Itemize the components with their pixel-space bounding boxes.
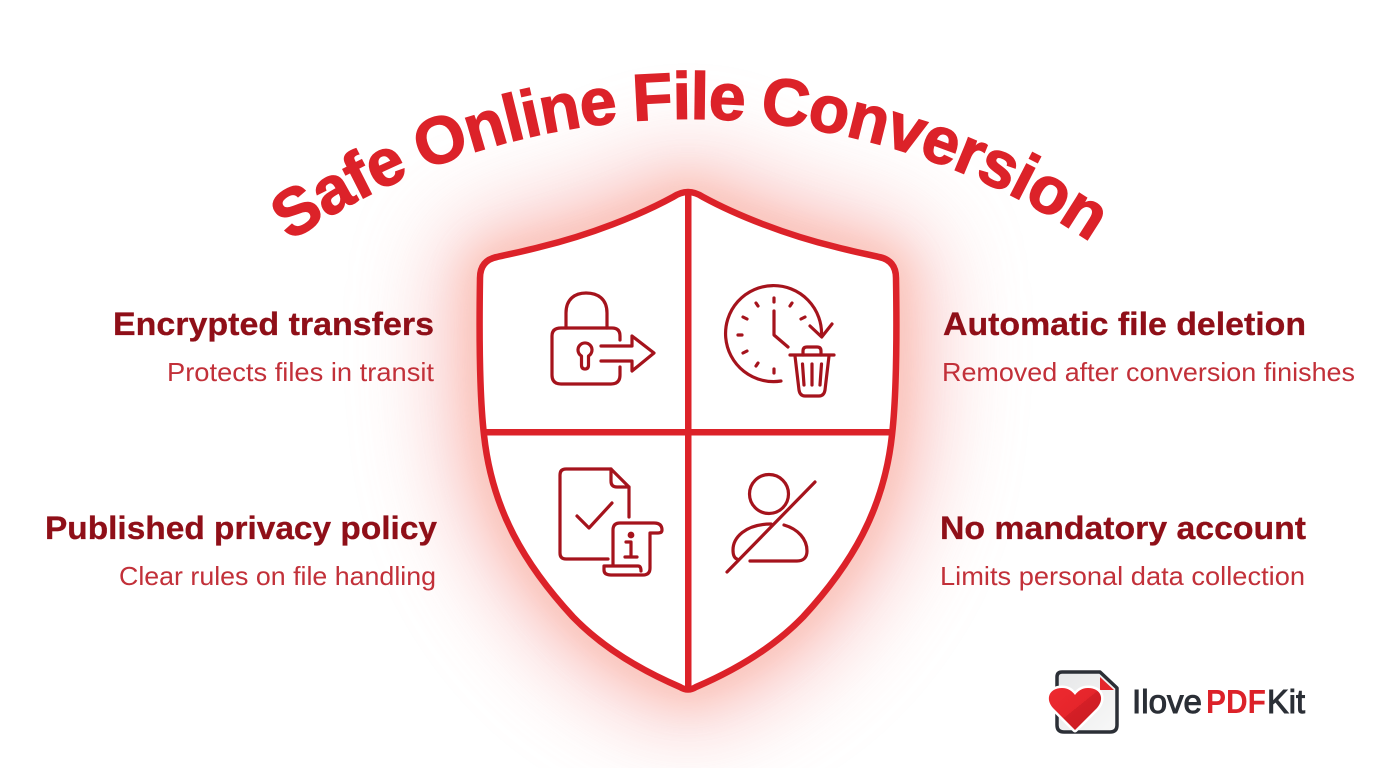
right feature: no mandatory account: Limits personal data collection — [940, 561, 1305, 591]
left feature: encrypted transfers: Encrypted transfers — [113, 306, 434, 342]
shield — [480, 191, 896, 690]
title: Safe Online File Conversion — [272, 70, 1103, 241]
left feature: published privacy policy: Clear rules on file handling — [119, 561, 436, 591]
right feature: no mandatory account — [940, 510, 1306, 591]
right feature: automatic file deletion: Removed after conversion finishes — [942, 357, 1355, 387]
icon: clock with trash can — [726, 286, 834, 396]
right feature: automatic file deletion: Automatic file deletion — [943, 306, 1306, 342]
icon: document with check and info scroll — [560, 469, 662, 575]
shield glow — [480, 192, 896, 690]
logo: IlovePDFKit: Kit — [1267, 683, 1305, 720]
logo: IlovePDFKit: Ilove — [1132, 683, 1202, 720]
right feature: automatic file deletion — [942, 306, 1355, 387]
left feature: encrypted transfers: Protects files in transit — [167, 357, 435, 387]
left feature: encrypted transfers — [113, 306, 435, 387]
right feature: no mandatory account: No mandatory account — [940, 510, 1306, 546]
icon: padlock with arrow — [552, 293, 654, 384]
icon: person with slash — [727, 474, 815, 572]
left feature: published privacy policy: Published privacy policy — [45, 510, 437, 546]
logo: IlovePDFKit: PDF — [1206, 683, 1266, 720]
left feature: published privacy policy — [45, 510, 437, 591]
logo: IlovePDFKit — [1049, 672, 1305, 732]
